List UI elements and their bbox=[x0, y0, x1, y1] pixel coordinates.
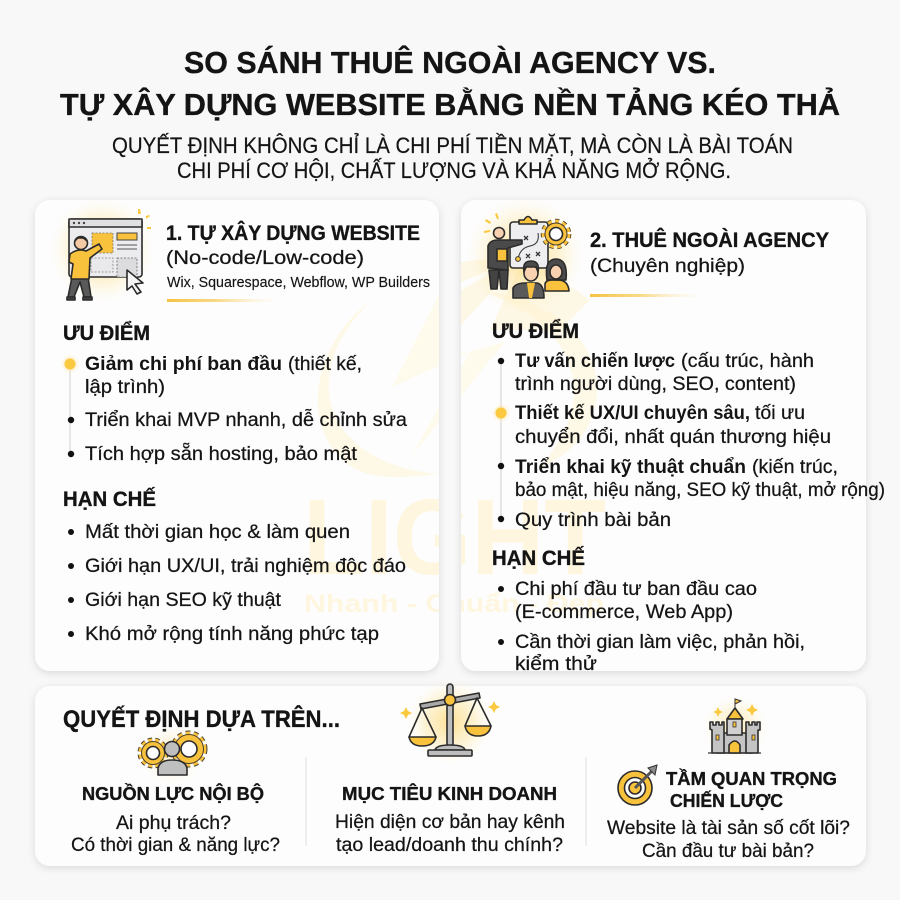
item: business goals: tạo lead/doanh thu chính? bbox=[336, 834, 563, 856]
list: cons: Giới hạn SEO kỹ thuật bbox=[85, 589, 282, 611]
item: strategic importance: TẦM QUAN TRỌNG bbox=[666, 768, 837, 789]
panel: decision content bbox=[63, 680, 850, 862]
list: pros: (kiến trúc, bbox=[752, 456, 838, 478]
item: internal resources: Có thời gian & năng lực? bbox=[71, 834, 280, 856]
list: pros: (thiết kế, bbox=[288, 353, 362, 375]
heading: cons: HẠN CHẾ bbox=[63, 488, 156, 511]
timeline bullets: pros bbox=[491, 358, 511, 522]
watermark logo: Nhanh - Chuẩn - Đẹp bbox=[304, 590, 604, 618]
list: pros: chuyển đổi, nhất quán thương hiệu bbox=[515, 426, 831, 448]
subtitle: QUYẾT ĐỊNH KHÔNG CHỈ LÀ CHI PHÍ TIỀN MẶT, MÀ CÒN LÀ BÀI TOÁN bbox=[112, 133, 793, 158]
icon: website builder bbox=[50, 198, 154, 302]
timeline bullets: pros bbox=[60, 354, 80, 457]
list: pros: Thiết kế UX/UI chuyên sâu, bbox=[515, 402, 750, 424]
item: strategic importance bbox=[607, 768, 850, 862]
heading: agency bbox=[590, 228, 829, 297]
list: cons: Khó mở rộng tính năng phức tạp bbox=[85, 623, 379, 645]
item: internal resources: Ai phụ trách? bbox=[116, 812, 231, 834]
icon: agency team bbox=[461, 197, 590, 330]
panel: self-build background bbox=[35, 200, 439, 671]
list: cons: Mất thời gian học & làm quen bbox=[85, 521, 350, 543]
list: pros: (cấu trúc, hành bbox=[681, 350, 814, 372]
list: pros: lập trình) bbox=[85, 376, 165, 398]
list: pros: Tích hợp sẵn hosting, bảo mật bbox=[85, 442, 358, 465]
item: business goals: MỤC TIÊU KINH DOANH bbox=[342, 783, 557, 804]
subtitle bbox=[112, 133, 793, 183]
icon: gears and person bbox=[140, 725, 205, 785]
heading: self-build: Wix, Squarespace, Webflow, WP Builders bbox=[167, 275, 430, 291]
list: pros bbox=[85, 353, 407, 465]
heading: self-build: 1. TỰ XÂY DỰNG WEBSITE bbox=[166, 221, 420, 245]
list: cons: Cần thời gian làm việc, phản hồi, bbox=[515, 631, 805, 653]
list: cons: Chi phí đầu tư ban đầu cao bbox=[515, 578, 757, 600]
list: pros: tối ưu bbox=[755, 402, 805, 424]
heading: pros: ƯU ĐIỂM bbox=[492, 320, 579, 343]
bullets: cons bbox=[498, 586, 504, 645]
panel: agency background bbox=[461, 200, 866, 671]
list: cons bbox=[85, 521, 406, 645]
heading: self-build bbox=[166, 221, 430, 302]
list: pros bbox=[515, 350, 885, 531]
list: pros: bảo mật, hiệu năng, SEO kỹ thuật, mở rộng) bbox=[515, 479, 885, 501]
heading: cons: HẠN CHẾ bbox=[492, 547, 585, 570]
watermark logo bbox=[303, 283, 606, 618]
item: internal resources bbox=[71, 783, 280, 856]
panel: self-build content bbox=[50, 198, 430, 645]
item: strategic importance: CHIẾN LƯỢC bbox=[670, 790, 783, 811]
heading: self-build: (No-code/Low-code) bbox=[166, 247, 364, 269]
heading: agency: (Chuyên nghiệp) bbox=[590, 255, 745, 277]
title: SO SÁNH THUÊ NGOÀI AGENCY VS. bbox=[184, 44, 716, 80]
item: business goals bbox=[335, 783, 565, 856]
icon: scales bbox=[400, 680, 500, 764]
bullets: cons bbox=[68, 529, 74, 637]
heading: pros: ƯU ĐIỂM bbox=[63, 322, 150, 345]
item: strategic importance: Website là tài sản số cốt lõi? bbox=[607, 817, 850, 839]
heading: decision: QUYẾT ĐỊNH DỰA TRÊN... bbox=[63, 705, 340, 733]
icon: castle bbox=[703, 696, 767, 760]
watermark logo: LIGHT bbox=[303, 476, 606, 597]
list: pros: Giảm chi phí ban đầu bbox=[85, 353, 282, 375]
list: cons: kiểm thử bbox=[515, 653, 597, 675]
title: TỰ XÂY DỰNG WEBSITE BẰNG NỀN TẢNG KÉO THẢ bbox=[60, 86, 840, 122]
list: cons bbox=[515, 578, 805, 675]
list: pros: Tư vấn chiến lược bbox=[515, 350, 675, 372]
list: pros: trình người dùng, SEO, content) bbox=[515, 373, 796, 395]
list: cons: (E-commerce, Web App) bbox=[515, 601, 733, 623]
panel: agency content bbox=[461, 197, 885, 675]
subtitle: CHI PHÍ CƠ HỘI, CHẤT LƯỢNG VÀ KHẢ NĂNG MỞ RỘNG. bbox=[177, 158, 731, 183]
heading: agency: 2. THUÊ NGOÀI AGENCY bbox=[590, 228, 829, 252]
list: pros: Quy trình bài bản bbox=[515, 509, 671, 531]
item: internal resources: NGUỒN LỰC NỘI BỘ bbox=[82, 783, 264, 804]
icon: target bbox=[618, 765, 657, 805]
item: strategic importance: Cần đầu tư bài bản? bbox=[642, 840, 814, 862]
item: business goals: Hiện diện cơ bản hay kênh bbox=[335, 811, 565, 833]
title bbox=[60, 44, 840, 122]
panel: decision background bbox=[35, 686, 866, 866]
list: cons: Giới hạn UX/UI, trải nghiệm độc đáo bbox=[85, 555, 406, 577]
list: pros: Triển khai kỹ thuật chuẩn bbox=[515, 456, 746, 478]
list: pros: Triển khai MVP nhanh, dễ chỉnh sửa bbox=[85, 408, 407, 431]
